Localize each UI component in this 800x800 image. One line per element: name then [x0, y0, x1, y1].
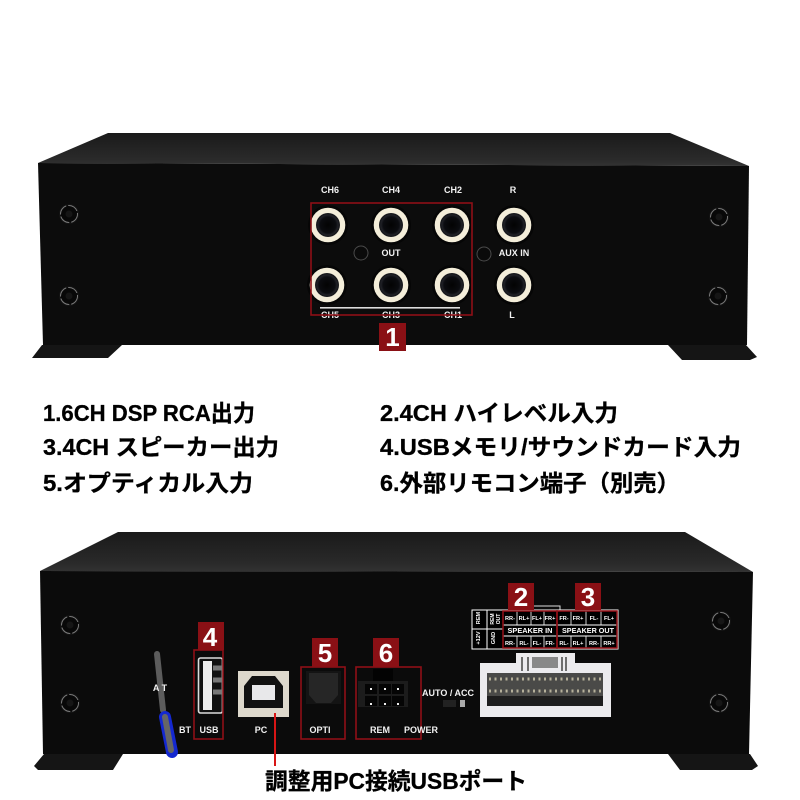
badge 6 — [373, 638, 399, 668]
channel labels: AUX IN — [499, 248, 529, 258]
speaker terminal table: RL- — [559, 641, 569, 647]
legend text: 2.4CH ハイレベル入力 — [380, 400, 618, 426]
legend text: 1.6CH DSP RCA出力 — [43, 400, 255, 426]
PC USB-B port: PC — [255, 725, 268, 735]
channel labels: OUT — [382, 248, 401, 258]
highlight box 6 with labels: POWER — [404, 725, 438, 735]
channel labels: L — [509, 310, 515, 320]
highlight box 6 with labels: REM — [370, 725, 390, 735]
AUTO/ACC switch: AUTO / ACC — [422, 688, 474, 698]
speaker terminal table: GND — [491, 632, 497, 644]
legend text: 6.外部リモコン端子（別売） — [380, 470, 680, 496]
badge 1: 1 — [385, 322, 400, 352]
badge 1 — [379, 322, 406, 352]
screws — [60, 611, 731, 713]
device front face — [38, 163, 749, 345]
legend text — [43, 400, 741, 496]
mounting feet — [32, 345, 757, 360]
highlight box 4 with USB label: USB — [199, 725, 219, 735]
speaker terminal table: RR+ — [603, 641, 615, 647]
panel: bottom device, rear view — [34, 532, 758, 770]
mounting feet — [34, 754, 758, 770]
antenna labels — [153, 683, 191, 735]
PC USB-B port — [238, 671, 289, 735]
badge 6: 6 — [379, 638, 393, 668]
badge 4: 4 — [203, 622, 218, 652]
optical port — [306, 671, 341, 704]
speaker terminal table: RR- — [505, 616, 515, 622]
speaker terminal table: RL+ — [573, 641, 584, 647]
device rear face — [40, 571, 753, 754]
badge 3 — [575, 582, 601, 612]
AUX IN jacks — [494, 205, 534, 305]
speaker terminal table: SPEAKER OUT — [562, 626, 614, 635]
highlight box 5 with OPTI label: OPTI — [309, 725, 331, 735]
channel labels: CH2 — [444, 185, 462, 195]
speaker terminal table: +12V — [476, 631, 482, 645]
AUTO/ACC switch — [422, 688, 474, 707]
channel labels: R — [510, 185, 517, 195]
speaker terminal table: FR- — [545, 641, 555, 647]
wiring harness connector — [480, 653, 611, 717]
speaker terminal table: OUT — [496, 614, 502, 624]
speaker terminal table: SPEAKER IN — [508, 626, 552, 635]
channel labels: CH5 — [321, 310, 339, 320]
speaker terminal table: FR- — [559, 616, 569, 622]
antenna labels: BT — [179, 725, 191, 735]
legend text: 5.オプティカル入力 — [43, 470, 253, 496]
USB port — [198, 658, 222, 713]
speaker terminal table: REM — [490, 613, 496, 625]
speaker terminal table: REM — [476, 611, 482, 624]
channel labels: CH4 — [382, 185, 400, 195]
speaker terminal table: RR- — [589, 641, 599, 647]
leader line to PC port — [274, 713, 276, 766]
speaker terminal table: RL+ — [519, 616, 530, 622]
channel labels: CH6 — [321, 185, 339, 195]
badge 5 — [312, 638, 338, 668]
badge 5: 5 — [318, 638, 332, 668]
badge 4 — [198, 622, 224, 652]
caption: PC USB port: 調整用PC接続USBポート — [265, 768, 527, 794]
antenna — [157, 654, 172, 752]
highlight box 5 with OPTI label — [301, 667, 345, 739]
channel labels: CH3 — [382, 310, 400, 320]
screws — [59, 204, 729, 306]
legend text: 4.USBメモリ/サウンドカード入力 — [380, 434, 741, 460]
legend text: 3.4CH スピーカー出力 — [43, 434, 279, 460]
speaker terminal table: FR+ — [545, 616, 556, 622]
speaker terminal table: FL- — [590, 616, 598, 622]
highlight box 4 with USB label — [194, 650, 223, 739]
device top surface — [38, 133, 749, 166]
channel labels: CH1 — [444, 310, 462, 320]
antenna labels: A T — [153, 683, 168, 693]
badge 2: 2 — [514, 582, 528, 612]
channel labels — [321, 185, 529, 320]
panel: top device, front view — [32, 133, 757, 360]
speaker terminal table: RL- — [519, 641, 529, 647]
speaker terminal table: FL- — [533, 641, 541, 647]
speaker terminal table: RR- — [505, 641, 515, 647]
output divider line — [320, 307, 460, 309]
speaker terminal table — [472, 606, 618, 649]
small ground screws — [354, 246, 491, 261]
output RCA jacks — [307, 205, 472, 305]
speaker terminal table: FR+ — [573, 616, 584, 622]
badge 2 — [508, 582, 534, 612]
badge 3: 3 — [581, 582, 595, 612]
speaker terminal table: FL+ — [604, 616, 615, 622]
device top surface — [40, 532, 753, 572]
speaker terminal table: FL+ — [532, 616, 543, 622]
highlight boxes 2 and 3 — [503, 611, 617, 648]
highlight box 6 with labels — [356, 667, 438, 739]
highlight box 1 — [311, 203, 472, 315]
remote connector — [358, 669, 408, 707]
